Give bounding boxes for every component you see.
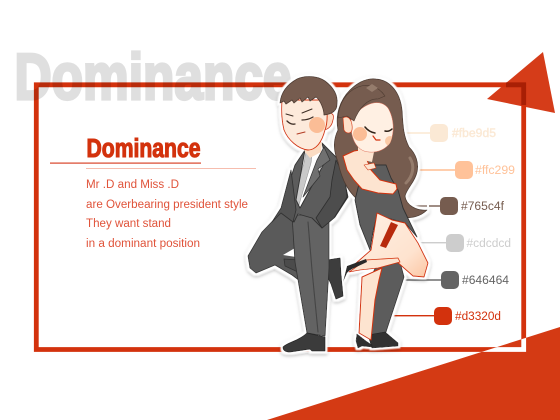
- trouser crease: [308, 222, 318, 332]
- right eye: [385, 129, 392, 131]
- ghost heading: Dominance: [14, 40, 292, 113]
- line 2: are Overbearing president style: [86, 199, 248, 211]
- arm: [343, 150, 397, 194]
- hair front: [338, 85, 385, 121]
- right eye: [302, 117, 313, 120]
- neck: [303, 137, 322, 158]
- title underline: [50, 162, 201, 164]
- description text: [86, 179, 248, 250]
- palette legend: [386, 124, 515, 325]
- bent leg shin: [284, 259, 329, 279]
- swatch: ffc299: #ffc299: [475, 165, 515, 177]
- secondary rule: [86, 168, 256, 169]
- hair back: [334, 79, 427, 218]
- jacket lapel: [303, 147, 330, 197]
- shirt: [292, 143, 326, 210]
- right cheek: [385, 136, 392, 146]
- cheek: [309, 117, 325, 133]
- mouth: [297, 132, 305, 134]
- bent leg: [248, 205, 302, 281]
- illustration: couple back to back: [248, 77, 428, 352]
- swatch: 765c4f: #765c4f: [461, 201, 505, 213]
- white frame corner over triangle: [482, 338, 526, 352]
- line 1: Mr .D and Miss .D: [86, 179, 179, 191]
- line 3: They want stand: [86, 218, 171, 230]
- cheeks: [353, 127, 395, 146]
- ear: [323, 113, 333, 130]
- raised lower leg: [349, 258, 400, 272]
- swatch: cdcdcd: [420, 234, 511, 252]
- hand: [364, 163, 376, 170]
- ear: [343, 117, 352, 133]
- swatch: d3320d: #d3320d: [455, 311, 501, 323]
- neck: [358, 147, 374, 162]
- dress: [355, 165, 417, 250]
- swatch: d3320d: [386, 307, 501, 325]
- swatch: 646464: [403, 271, 510, 289]
- hair highlight: [406, 158, 413, 183]
- swatch: ffc299: [417, 161, 515, 179]
- swatch: 646464: #646464: [462, 275, 510, 287]
- hair crown highlight: [366, 84, 378, 92]
- eyes and lips: [365, 127, 392, 140]
- left cheek: [353, 127, 367, 141]
- jacket: [282, 143, 348, 228]
- figure: woman: [334, 79, 428, 348]
- line 4: in a dominant position: [86, 238, 200, 250]
- hair: [280, 77, 337, 115]
- white gap under knee: [283, 248, 296, 257]
- title: Dominance: [86, 135, 200, 163]
- swatch: 765c4f: [414, 197, 505, 215]
- face: [351, 103, 393, 152]
- face: [282, 100, 327, 150]
- left eye: [287, 121, 295, 124]
- swatch: fbe9d5: #fbe9d5: [452, 128, 496, 140]
- left eye: [365, 127, 375, 133]
- arm in pocket: [316, 160, 347, 228]
- lips: [373, 136, 380, 140]
- jacket lower left: [272, 170, 296, 222]
- brows and eyes: [286, 109, 313, 134]
- raised high heel: [343, 259, 367, 282]
- tie: [294, 152, 312, 205]
- back leg: [368, 250, 404, 338]
- swatch: fbe9d5: [398, 124, 496, 142]
- darker overlap of frame and triangle: [506, 85, 524, 105]
- raised thigh: [355, 213, 428, 277]
- standing shoe: [283, 333, 325, 352]
- right eyebrow: [302, 109, 312, 113]
- figure: man: [248, 77, 348, 352]
- standing leg: [292, 215, 329, 336]
- bottom right triangle: [267, 327, 560, 420]
- back shoe: [368, 332, 398, 348]
- red garter: [380, 222, 398, 248]
- top right triangle: [487, 52, 555, 113]
- swatch: cdcdcd: #cdcdcd: [466, 238, 511, 250]
- raised shoe: [327, 258, 343, 299]
- left eyebrow: [286, 114, 293, 116]
- front heel: [356, 334, 372, 348]
- standing shin: [359, 268, 382, 340]
- red frame: [36, 85, 524, 350]
